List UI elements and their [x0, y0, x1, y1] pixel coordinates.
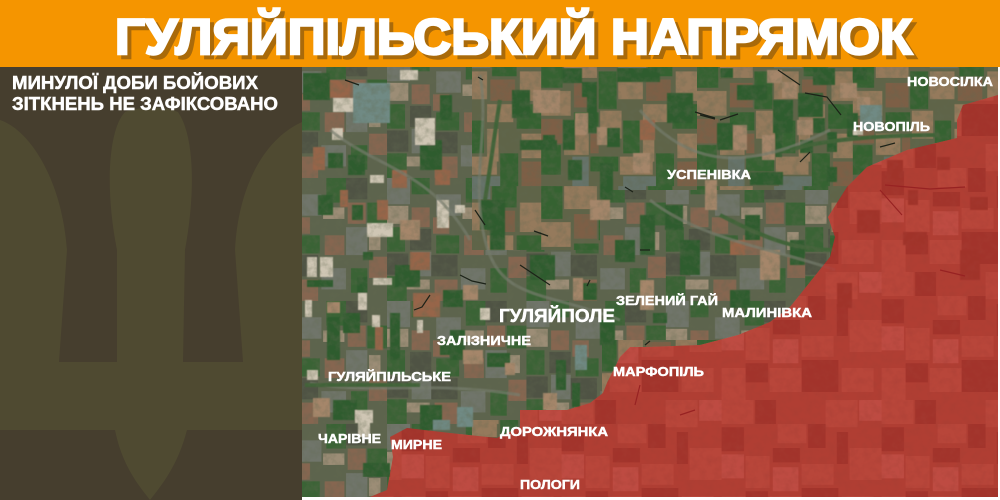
- text: no clashes reported: МИНУЛОЇ ДОБИ БОЙОВИХ: [12, 72, 258, 93]
- label: ГУЛЯЙПОЛЕ: [499, 305, 615, 326]
- label: ЧАРІВНЕ: [318, 431, 381, 446]
- text: no clashes reported: ЗІТКНЕНЬ НЕ ЗАФІКСОВАНО: [12, 94, 278, 114]
- occupied territory overlay: [370, 95, 998, 497]
- fields: rust brown: [313, 80, 745, 350]
- header band: [0, 0, 1000, 69]
- label: ЗАЛІЗНИЧНЕ: [437, 333, 531, 348]
- label: ЗЕЛЕНИЙ ГАЙ: [616, 293, 718, 308]
- fields: grey: [353, 83, 882, 430]
- fields: green: [303, 68, 867, 477]
- label: МАЛИНІВКА: [722, 305, 813, 320]
- panel: left summary: [0, 67, 302, 500]
- text: no clashes reported: [12, 72, 278, 114]
- gullies: [345, 70, 895, 345]
- dark fields in the occupied zone: [837, 157, 988, 308]
- label: ПОЛОГИ: [520, 477, 580, 492]
- texture: [302, 67, 998, 497]
- label: НОВОПІЛЬ: [853, 119, 930, 134]
- map: satellite view: [302, 67, 998, 497]
- fields: pale and white: [305, 70, 863, 437]
- label: МАРФОПІЛЬ: [613, 364, 704, 379]
- title: ГУЛЯЙПІЛЬСЬКИЙ НАПРЯМОК: [115, 8, 912, 65]
- label: МИРНЕ: [391, 437, 442, 452]
- fields: tan: [313, 70, 870, 417]
- label: ГУЛЯЙПІЛЬСЬКЕ: [328, 369, 451, 384]
- label: УСПЕНІВКА: [667, 167, 752, 182]
- label: НОВОСІЛКА: [907, 74, 994, 89]
- labels: settlements: [318, 74, 994, 492]
- label: ДОРОЖНЯНКА: [500, 424, 609, 439]
- title: ГУЛЯЙПІЛЬСЬКИЙ НАПРЯМОК: [119, 12, 916, 69]
- icon: trident emblem: [0, 108, 302, 500]
- valley streaks: [310, 75, 835, 395]
